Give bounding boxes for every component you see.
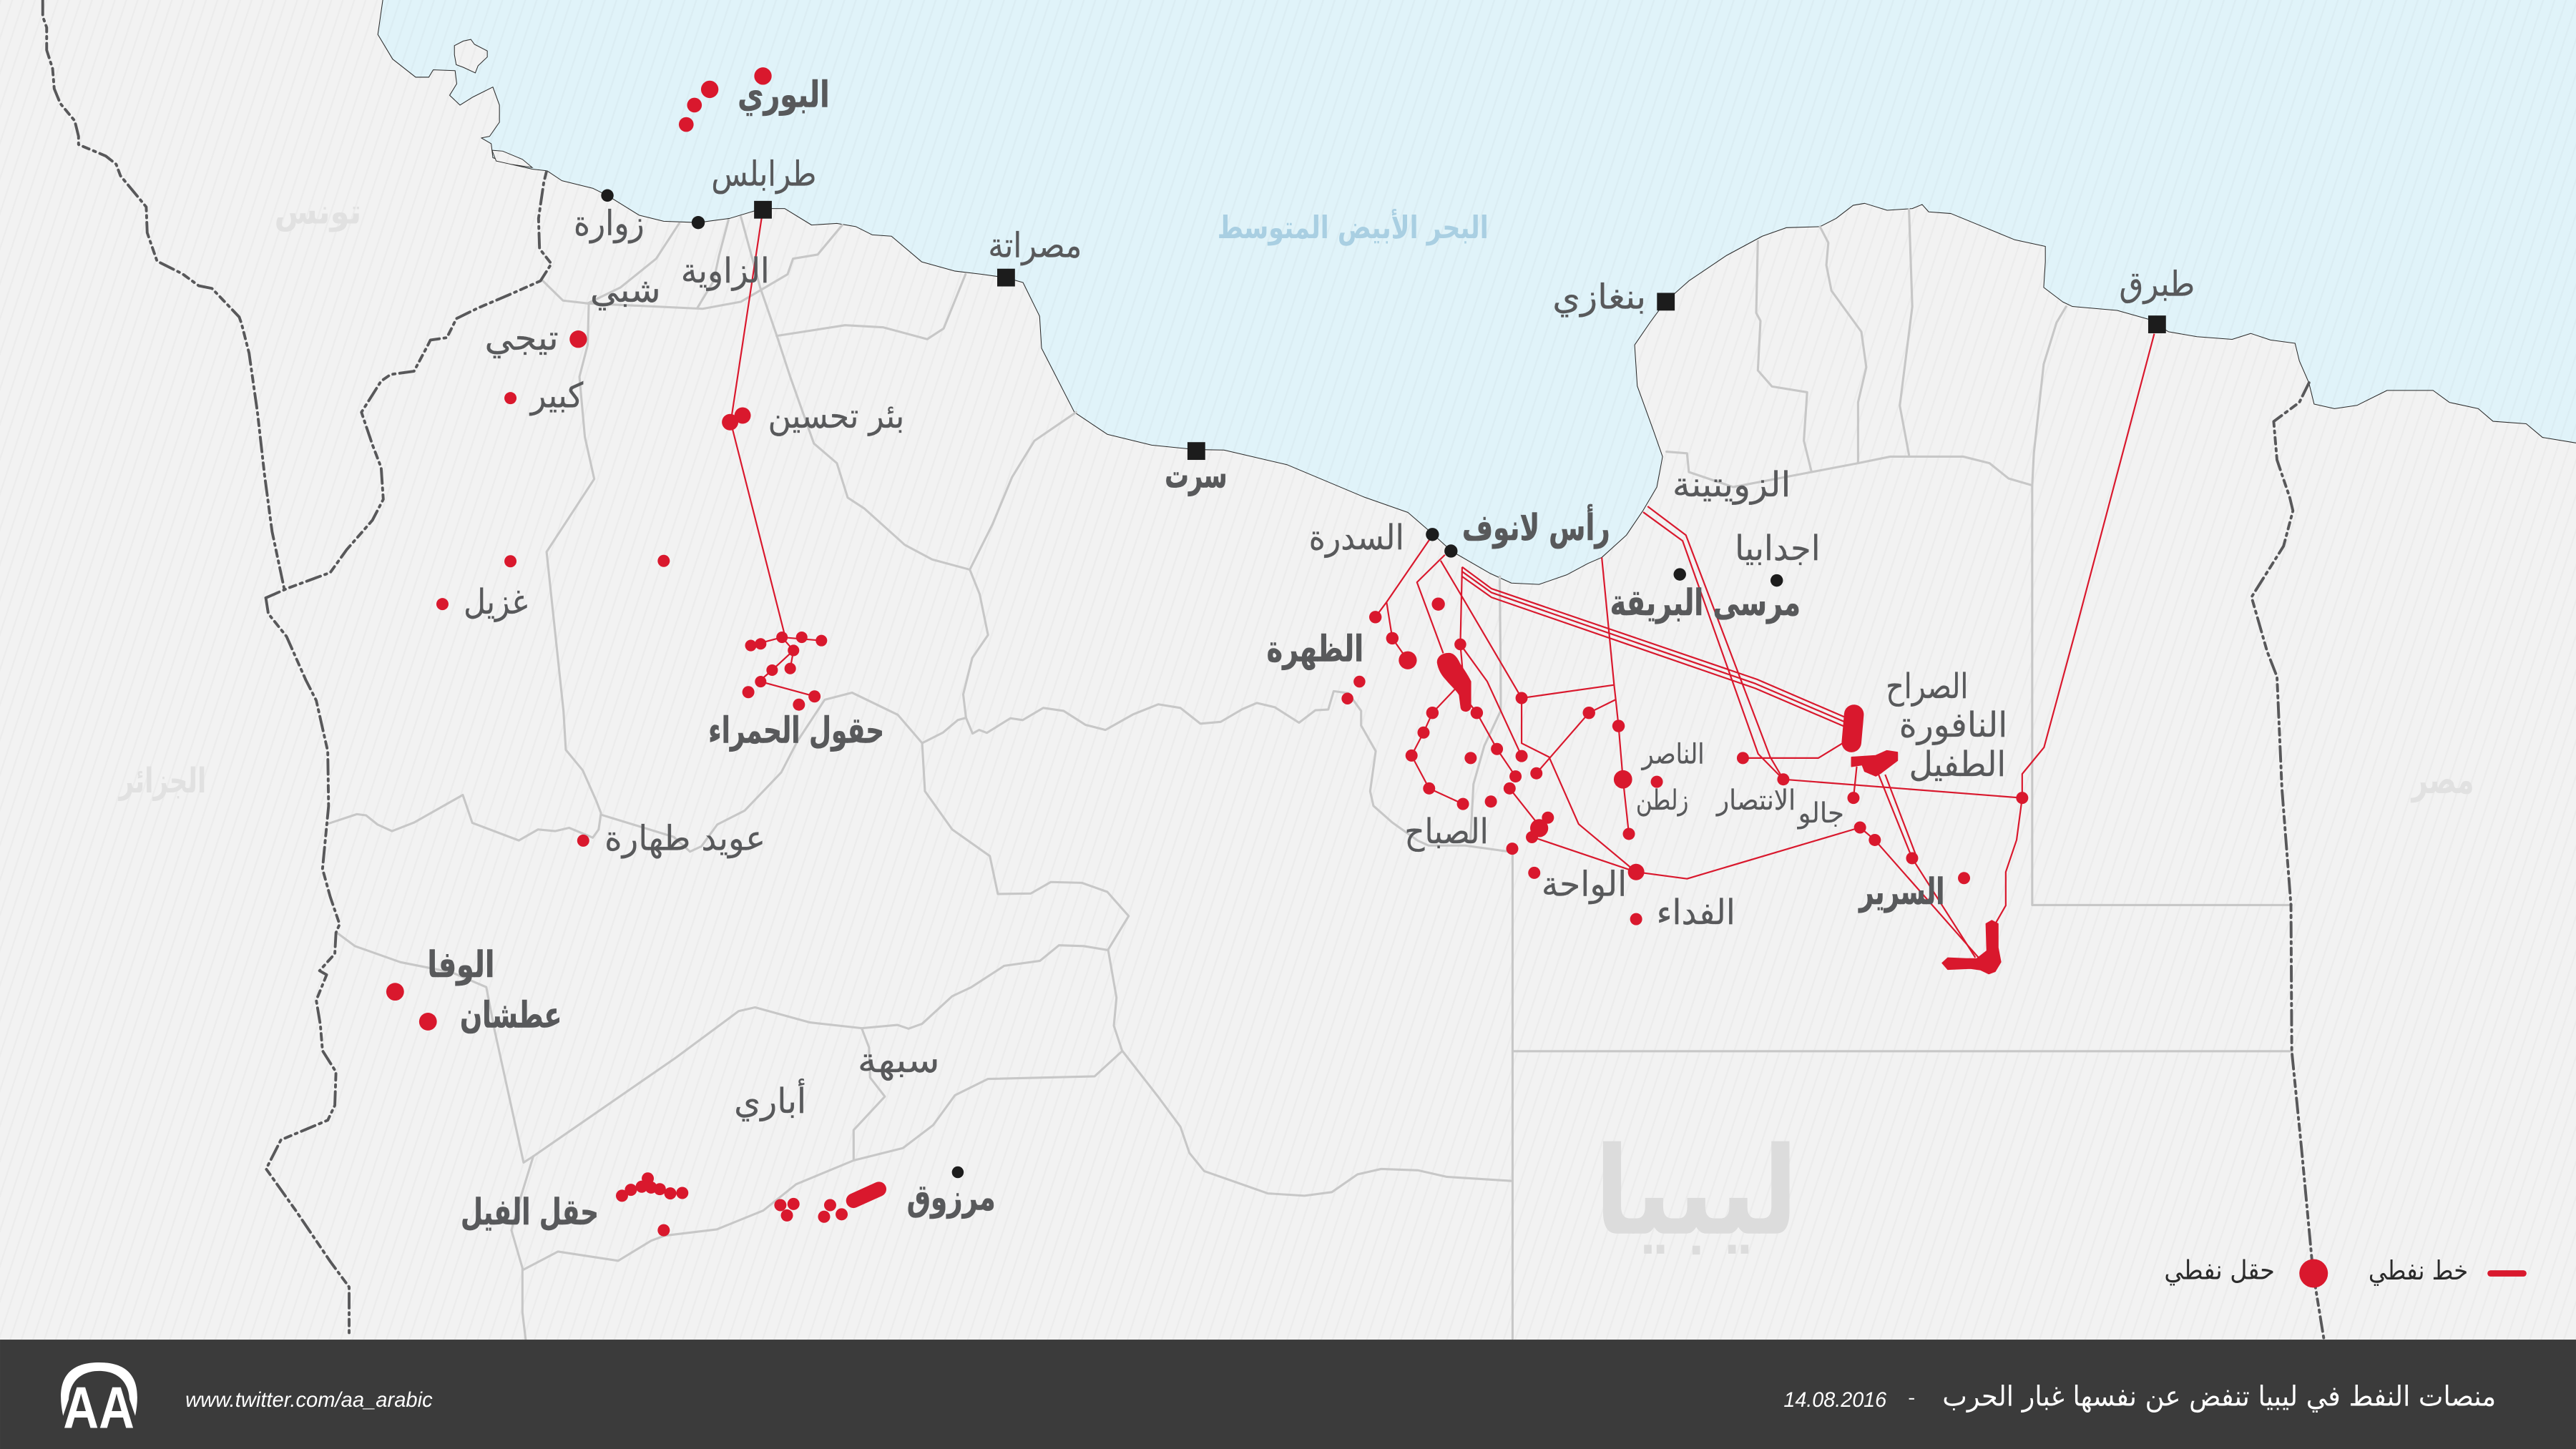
field blobs [853, 654, 2001, 1201]
map labels: النافورة [1899, 705, 2007, 745]
map labels: حقل الفيل [461, 1191, 599, 1233]
watermark: country name: ليبيا [1595, 1121, 1798, 1263]
oil pipelines [731, 217, 2154, 959]
map labels: السدرة [1309, 518, 1404, 558]
map labels: جالو [1797, 797, 1844, 830]
map labels: مرسى البريقة [1610, 581, 1801, 624]
legend: pipeline label: خط نفطي [2369, 1255, 2468, 1286]
map labels: طبرق [2120, 264, 2195, 304]
map labels: حقول الحمراء [708, 709, 884, 752]
map labels: طرابلس [711, 154, 816, 195]
map labels: مرزوق [907, 1176, 996, 1219]
footer dash [1909, 1398, 1914, 1400]
map labels: الجزائر [118, 761, 206, 801]
map labels: كبير [529, 376, 583, 416]
map labels: سرت [1165, 454, 1228, 497]
legend: pipeline swatch [2491, 1272, 2523, 1274]
map labels: عطشان [460, 994, 562, 1036]
logo: Anadolu Agency: AA [63, 1375, 134, 1441]
map labels: اجدابيا [1735, 529, 1821, 569]
map labels: غزيل [464, 582, 528, 622]
map labels: عويد طهارة [604, 818, 765, 858]
map labels: الواحة [1542, 865, 1627, 905]
lagoon outline [492, 150, 532, 167]
map labels: الفداء [1657, 893, 1735, 933]
sea: Mediterranean [378, 0, 2576, 584]
map labels: الناصر [1641, 738, 1705, 770]
legend: field swatch [2299, 1259, 2328, 1287]
map labels: الظهرة [1267, 628, 1363, 671]
oil fields [386, 67, 2028, 1237]
map labels: رأس لانوف [1462, 504, 1610, 549]
internal administrative boundaries [328, 210, 2292, 1340]
map labels: الطفيل [1909, 745, 2006, 785]
legend: field label: حقل نفطي [2164, 1254, 2275, 1285]
map labels: أباري [734, 1079, 806, 1121]
footer title: منصات النفط في ليبيا تنفض عن نفسها غبار الحرب [1942, 1381, 2496, 1413]
map labels: الانتصار [1715, 785, 1796, 817]
map labels: السرير [1858, 870, 1944, 913]
map labels: شبي [590, 270, 661, 310]
map labels: الصباح [1405, 812, 1489, 852]
footer url: www.twitter.com/aa_arabic [185, 1388, 433, 1412]
map labels: سبهة [858, 1041, 940, 1081]
map labels: الزاوية [681, 251, 770, 291]
map labels: الزويتينة [1673, 465, 1791, 505]
map labels: زلطن [1636, 785, 1688, 817]
city markers [601, 190, 2166, 1178]
map labels: مصراتة [988, 225, 1082, 265]
map labels: الصراح [1886, 667, 1968, 707]
island: Djerba [454, 39, 487, 73]
footer date: 14.08.2016 [1783, 1388, 1887, 1412]
map labels [118, 73, 2474, 1233]
map labels: بنغازي [1552, 277, 1646, 318]
map labels: بئر تحسين [768, 396, 904, 436]
map labels: تيجي [484, 318, 559, 358]
footer bar [0, 1340, 2576, 1449]
map labels: البوري [738, 73, 830, 116]
map labels: مصر [2410, 757, 2474, 803]
map labels: الوفا [427, 943, 495, 986]
map labels: تونس [275, 192, 361, 232]
legend [2164, 1254, 2523, 1287]
map labels: البحر الأبيض المتوسط [1218, 208, 1489, 246]
map labels: زوارة [574, 203, 645, 243]
